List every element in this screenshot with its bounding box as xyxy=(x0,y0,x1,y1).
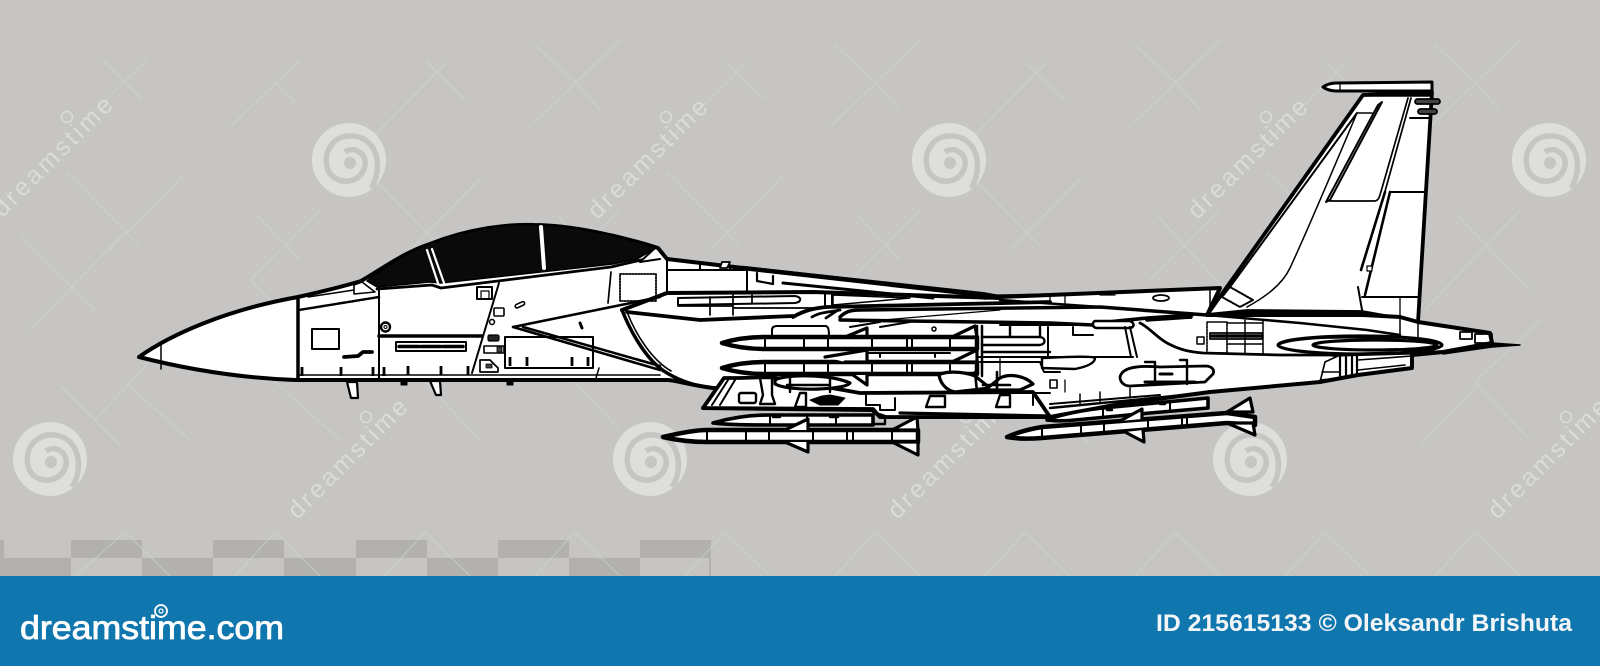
missile: left upper xyxy=(713,412,885,425)
watermark: dreamstime text xyxy=(0,91,1600,524)
watermark: dreamstime text: dreamstime xyxy=(582,93,713,224)
missile: left lower xyxy=(663,417,918,455)
footer credit: ID 215615133 © Oleksandr Brishuta xyxy=(1156,610,1572,637)
intake and upper wing xyxy=(622,260,1207,388)
canopy xyxy=(367,225,660,289)
watermark: dreamstime text: dreamstime xyxy=(882,393,1013,524)
watermark: dreamstime text: dreamstime xyxy=(282,393,413,524)
landing gear doors and antennae xyxy=(347,381,513,398)
missile: right lower xyxy=(1007,398,1255,442)
footer bar xyxy=(0,576,1600,666)
forward fuselage details xyxy=(161,272,660,380)
aircraft: F-15 side view xyxy=(139,82,1520,455)
fin tip pod xyxy=(1323,82,1440,114)
checker strip xyxy=(0,540,711,576)
vertical fin xyxy=(1207,92,1432,333)
missile: upper fuselage xyxy=(722,322,977,349)
footer logo: dreamstime.com xyxy=(20,609,284,646)
fuselage silhouette xyxy=(139,225,1492,417)
missile: lower fuselage xyxy=(722,326,1060,385)
watermark: spiral logos xyxy=(13,123,1586,496)
tail spike xyxy=(1443,343,1520,354)
watermark: small copyright rings xyxy=(62,112,1572,422)
watermark: dreamstime text: dreamstime xyxy=(1182,93,1313,224)
centre pylons and lower fairing xyxy=(703,372,1205,417)
rear fuselage xyxy=(977,288,1492,392)
missile: right upper xyxy=(1047,398,1208,421)
